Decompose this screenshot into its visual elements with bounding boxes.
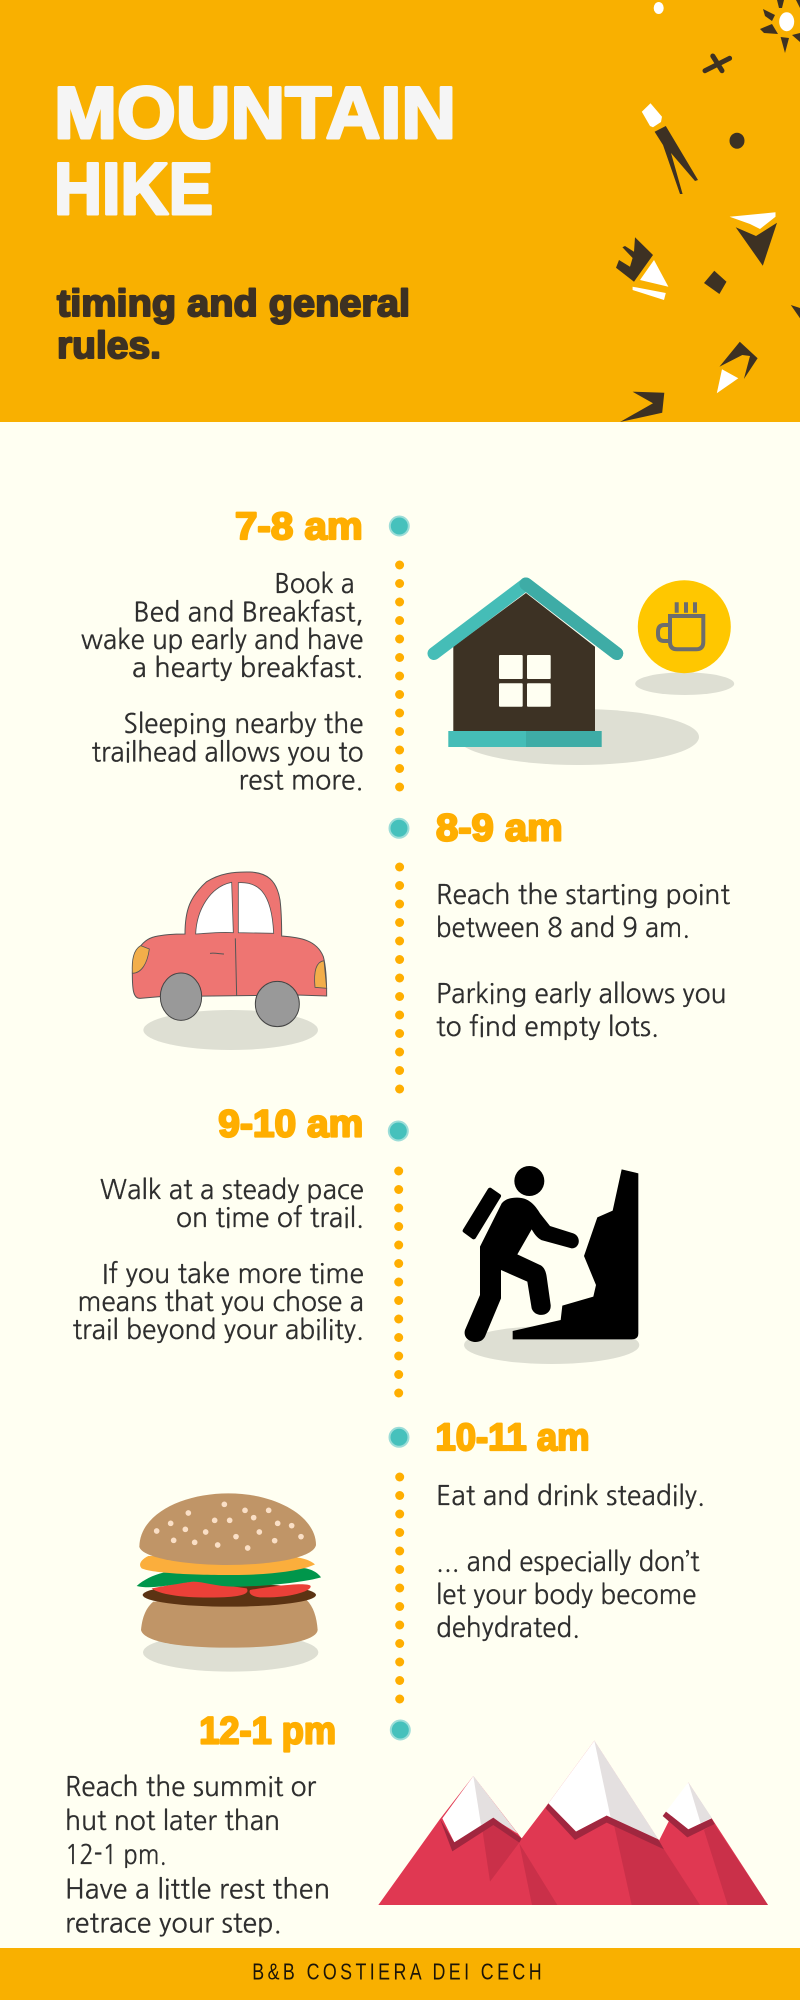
timeline: 8-9 am node	[390, 819, 408, 838]
icon: hiker climbing	[464, 1166, 639, 1364]
title	[54, 73, 456, 230]
text block: 10-11 am: Eat and drink steadily.	[436, 1482, 705, 1509]
text block: 7-8 am: trailhead allows you to	[92, 738, 364, 766]
heading: 12-1 pm: 12-1 pm	[199, 1710, 336, 1752]
icon: house	[434, 584, 699, 765]
timeline dots 4	[395, 1472, 404, 1704]
heading: 8-9 am: 8-9 am	[436, 808, 563, 850]
text block: 9-10 am: means that you chose a	[78, 1288, 364, 1315]
heading: 10-11 am: 10-11 am	[436, 1417, 590, 1459]
text block: 12-1 pm: hut not later than	[65, 1807, 280, 1834]
text block: 7-8 am: wake up early and have	[81, 626, 364, 653]
subtitle: timing and general	[57, 283, 410, 325]
subtitle	[57, 283, 410, 367]
title: HIKE	[54, 149, 213, 230]
heading: 7-8 am: 7-8 am	[235, 506, 363, 548]
text block: 9-10 am: on time of trail.	[176, 1204, 364, 1231]
icon: burger	[137, 1493, 321, 1672]
timeline: 7-8 am node	[390, 516, 409, 536]
text block: 12-1 pm	[65, 1773, 330, 1936]
decorative mountaineering shapes	[616, 0, 800, 422]
footer bar	[0, 1948, 800, 2000]
icon: mountains	[378, 1741, 768, 1905]
timeline dots 1	[395, 560, 404, 792]
text block: 7-8 am: rest more.	[238, 766, 364, 794]
text block: 10-11 am	[436, 1482, 705, 1641]
text block: 9-10 am: trail beyond your ability.	[72, 1316, 364, 1343]
timeline: 12-1 pm node	[391, 1720, 410, 1740]
timeline dots 2	[395, 862, 404, 1094]
footer text: B&B COSTIERA DEI CECH	[252, 1958, 545, 1984]
text block: 7-8 am	[81, 570, 364, 794]
timeline dots 3	[394, 1166, 403, 1398]
text block: 10-11 am: dehydrated.	[436, 1614, 580, 1641]
text block: 8-9 am: between 8 and 9 am.	[436, 914, 690, 941]
text block: 8-9 am	[436, 881, 730, 1040]
text block: 10-11 am: ... and especially don’t	[436, 1548, 700, 1575]
text block: 9-10 am: If you take more time	[102, 1260, 364, 1287]
text block: 8-9 am: Parking early allows you	[436, 980, 726, 1007]
text block: 8-9 am: Reach the starting point	[436, 881, 730, 908]
text block: 7-8 am: Bed and Breakfast,	[134, 598, 364, 626]
icon: car	[132, 872, 327, 1050]
heading: 9-10 am: 9-10 am	[218, 1104, 363, 1146]
text block: 12-1 pm: Reach the summit or	[65, 1773, 316, 1800]
title: MOUNTAIN	[54, 73, 456, 154]
subtitle: rules.	[57, 325, 161, 367]
text block: 10-11 am: let your body become	[436, 1581, 696, 1608]
text block: 12-1 pm: 12-1 pm.	[65, 1841, 167, 1868]
text block: 7-8 am: Sleeping nearby the	[124, 710, 364, 737]
timeline: 10-11 am node	[390, 1428, 408, 1447]
text block: 7-8 am: Book a	[274, 570, 354, 597]
text block: 12-1 pm: retrace your step.	[65, 1909, 282, 1936]
text block: 8-9 am: to find empty lots.	[436, 1013, 659, 1040]
text block: 9-10 am: Walk at a steady pace	[100, 1176, 364, 1203]
text block: 7-8 am: a hearty breakfast.	[132, 654, 364, 681]
text block: 9-10 am	[72, 1176, 364, 1343]
timeline: 9-10 am node	[389, 1122, 408, 1140]
header banner	[0, 0, 800, 422]
text block: 12-1 pm: Have a little rest then	[65, 1875, 330, 1902]
icon: coffee cup	[635, 580, 734, 695]
